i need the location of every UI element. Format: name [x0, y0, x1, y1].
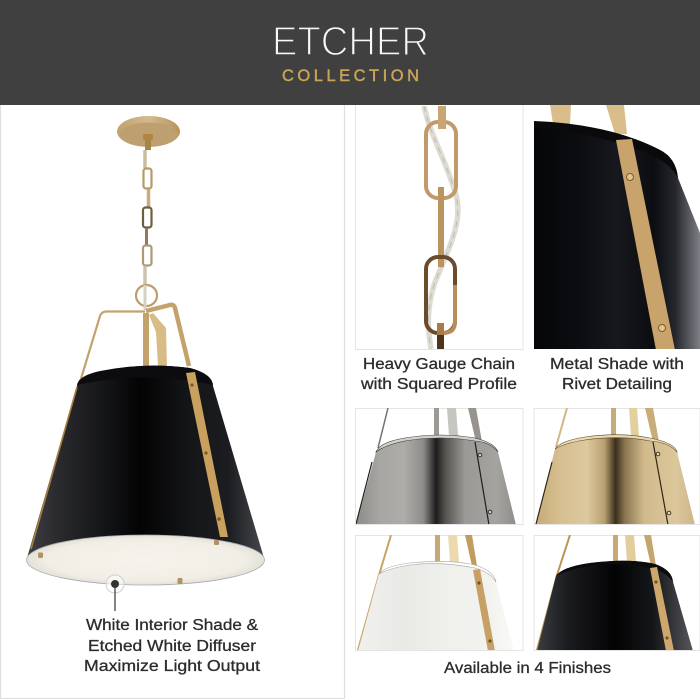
caption: chain	[360, 356, 517, 393]
caption: shade: Metal Shade with	[550, 356, 684, 373]
panel: black finish	[534, 535, 700, 651]
panel: chain detail	[356, 100, 523, 350]
shade rim	[77, 366, 213, 385]
hanger arms	[80, 305, 189, 382]
caption: shade: Rivet Detailing	[562, 376, 672, 393]
rim	[534, 121, 678, 178]
icon: ceiling canopy	[117, 116, 180, 150]
callout text: Maximize Light Output	[84, 658, 261, 675]
callout text: Etched White Diffuser	[88, 638, 256, 655]
upper straps	[550, 105, 627, 134]
subtitle: COLLECTION: COLLECTION	[282, 67, 419, 85]
power cord	[424, 106, 458, 349]
panel: nickel finish	[356, 408, 523, 525]
chain	[136, 150, 157, 310]
diffuser rivets	[38, 540, 219, 584]
callout marker	[106, 575, 124, 611]
left edge strap	[31, 387, 77, 549]
title: ETCHER: ETCHER	[272, 18, 429, 64]
caption: finishes: Available in 4 Finishes	[444, 660, 611, 677]
header banner	[0, 0, 700, 105]
brass strap with rivets	[186, 372, 228, 537]
panel: shade detail	[534, 105, 700, 350]
black shade body	[534, 122, 700, 350]
caption: chain: with Squared Profile	[360, 376, 517, 393]
brass strap with rivets	[616, 139, 675, 350]
callout text: White Interior Shade &	[86, 617, 259, 634]
panel: main pendant	[0, 100, 344, 698]
white diffuser	[26, 535, 264, 585]
chain links	[426, 105, 456, 350]
panel: brass finish	[534, 408, 700, 525]
callout text	[84, 617, 261, 675]
caption: shade	[550, 356, 684, 393]
panel: white finish	[356, 535, 523, 651]
black shade	[27, 366, 264, 558]
caption: chain: Heavy Gauge Chain	[363, 356, 515, 373]
